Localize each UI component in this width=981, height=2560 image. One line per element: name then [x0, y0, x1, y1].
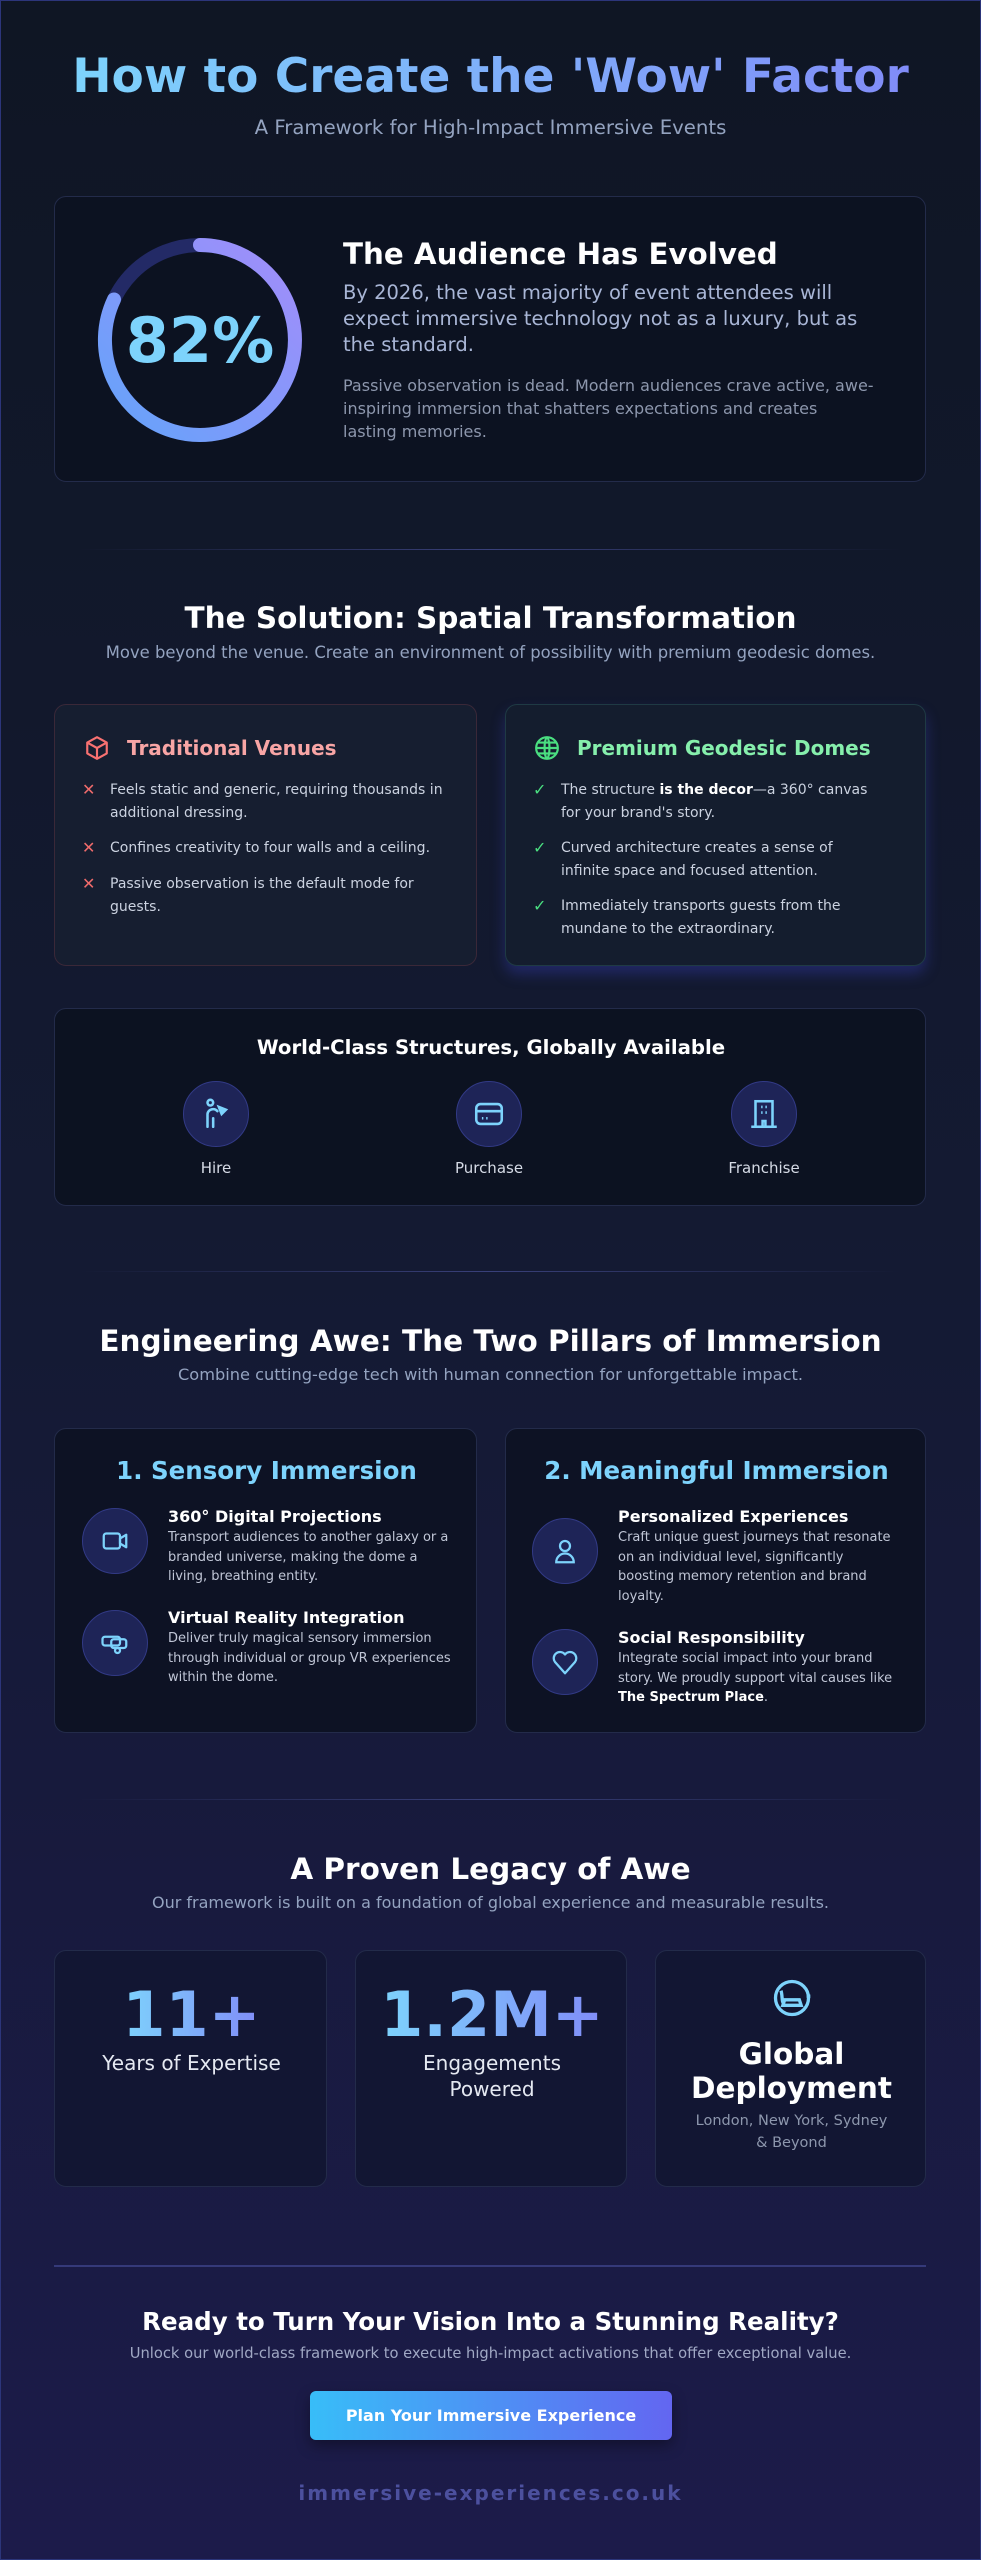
icon: purchase [456, 1081, 522, 1147]
stat: engagements: 1.2M+ [380, 1978, 604, 2051]
subheading: Move beyond the venue. Create an environment of possibility with premium geodesic domes. [106, 643, 875, 662]
stat: years: 11+ [122, 1978, 261, 2051]
list: Passive observation is the default mode for guests. [110, 876, 414, 915]
item: social responsibility: Social Responsibility [618, 1628, 805, 1647]
icon: globe [535, 736, 559, 760]
heading: legacy: A Proven Legacy of Awe [290, 1852, 691, 1886]
icon: person [532, 1518, 598, 1584]
panel: audience [54, 196, 926, 482]
list: Confines creativity to four walls and a ceiling. [110, 840, 430, 856]
label: Franchise [728, 1159, 800, 1177]
heading: engineering awe: Engineering Awe: The Two Pillars of Immersion [99, 1324, 882, 1358]
panel: sensory immersion [54, 1428, 477, 1733]
heading: Premium Geodesic Domes [577, 736, 871, 760]
stat: global deployment [655, 1950, 926, 2187]
stat: engagements: Powered [449, 2077, 535, 2101]
subheading: Combine cutting-edge tech with human connection for unforgettable impact. [178, 1365, 803, 1384]
panel: geodesic domes [505, 704, 926, 966]
heading: Traditional Venues [127, 736, 337, 760]
heading: World-Class Structures, Globally Available [257, 1036, 725, 1059]
chart: 82% ring: 82% [126, 304, 274, 377]
stat: global deployment: Global [739, 2037, 844, 2071]
item: vr: Deliver truly magical sensory immersion through individual or group VR experiences within the dome. [168, 1631, 451, 1685]
heading: 1. Sensory Immersion [116, 1456, 417, 1485]
list: ✓ [533, 780, 546, 799]
title: How to Create the 'Wow' Factor [72, 49, 909, 104]
item: social responsibility: Integrate social impact into your brand story. We proudly support vital causes like The Spectrum Place. [618, 1651, 892, 1705]
list: The structure is the decor—a 360° canvas for your brand's story. [561, 782, 867, 821]
icon: globe [774, 1980, 810, 2016]
text block: Passive observation is dead. Modern audiences crave active, awe-inspiring immersion that shatters expectations and creates lasting memories. [343, 376, 874, 441]
list: ✕ [82, 838, 95, 857]
icon: vr [82, 1610, 148, 1676]
subheading: Our framework is built on a foundation of global experience and measurable results. [152, 1893, 829, 1912]
icon: box [86, 736, 108, 760]
button [310, 2391, 672, 2440]
text block: By 2026, the vast majority of event attendees will expect immersive technology not as a luxury, but as the standard. [343, 281, 857, 356]
footer url: immersive-experiences.co.uk [298, 2481, 683, 2505]
stat: years: Years of Expertise [102, 2051, 281, 2075]
list: ✕ [82, 874, 95, 893]
subheading: Unlock our world-class framework to execute high-impact activations that offer exceptional value. [130, 2345, 851, 2362]
stat: global deployment: London, New York, Sydney [696, 2113, 887, 2129]
list: Immediately transports guests from the mundane to the extraordinary. [561, 898, 840, 937]
label: Purchase [455, 1159, 523, 1177]
label: Hire [201, 1159, 231, 1177]
item: projections: 360° Digital Projections [168, 1507, 382, 1526]
icon: franchise [731, 1081, 797, 1147]
list: ✓ [533, 838, 546, 857]
heading: cta: Ready to Turn Your Vision Into a Stunning Reality? [142, 2307, 839, 2336]
icon: hire [183, 1081, 249, 1147]
stat: years [54, 1950, 327, 2187]
item: vr: Virtual Reality Integration [168, 1608, 404, 1627]
stat: engagements [355, 1950, 627, 2187]
stat: global deployment: Deployment [691, 2071, 892, 2105]
list: ✕ [82, 780, 95, 799]
list [82, 780, 443, 915]
item: personalized: Craft unique guest journeys that resonate on an individual level, significantly boosting memory retention and brand loyalty. [618, 1530, 891, 1604]
stat: global deployment: & Beyond [756, 2135, 827, 2151]
heading: 2. Meaningful Immersion [544, 1456, 889, 1485]
panel: traditional venues [54, 704, 477, 966]
subtitle: A Framework for High-Impact Immersive Events [255, 116, 726, 139]
item: personalized: Personalized Experiences [618, 1507, 848, 1526]
item: projections: Transport audiences to another galaxy or a branded universe, making the dome a living, breathing entity. [168, 1530, 448, 1584]
heading: solution: The Solution: Spatial Transformation [184, 601, 797, 635]
icon: heart [532, 1629, 598, 1695]
chart: 82% ring [98, 238, 302, 442]
list: Curved architecture creates a sense of infinite space and focused attention. [561, 840, 833, 879]
list: Feels static and generic, requiring thousands in additional dressing. [110, 782, 443, 821]
icon: video [82, 1508, 148, 1574]
list [533, 780, 867, 937]
stat: engagements: Engagements [423, 2051, 561, 2075]
button: Plan Your Immersive Experience [346, 2406, 636, 2425]
panel: meaningful immersion [505, 1428, 926, 1733]
list: ✓ [533, 896, 546, 915]
heading: The Audience Has Evolved [343, 237, 778, 271]
panel: world-class structures [54, 1008, 926, 1206]
